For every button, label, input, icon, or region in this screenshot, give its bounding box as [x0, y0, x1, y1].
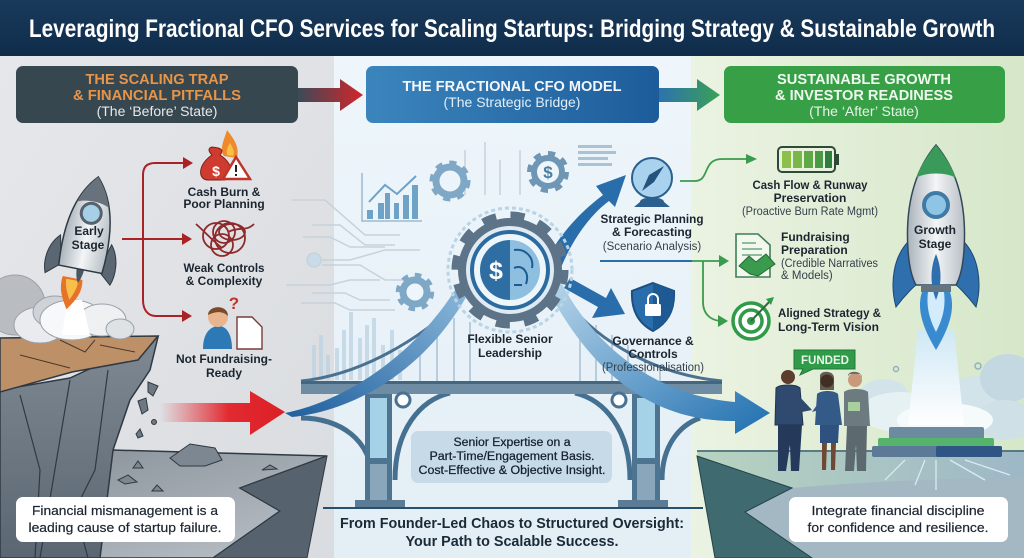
- callout: financial mismanagement: [16, 497, 235, 542]
- heading: sustainable growth: & INVESTOR READINESS: [775, 88, 953, 104]
- callout: senior expertise: Cost-Effective & Objective Insight.: [418, 465, 606, 477]
- heading: the fractional cfo model: (The Strategic Bridge): [444, 94, 580, 110]
- text: growth stage: Growth: [914, 223, 956, 237]
- heading: the fractional cfo model: [366, 66, 659, 123]
- icon: line chart: [362, 173, 422, 221]
- text: cash flow: Cash Flow & Runway: [752, 178, 868, 192]
- text: cash flow: [742, 178, 878, 218]
- right ground and cliff: [697, 451, 1024, 558]
- branching arrows: [122, 163, 186, 316]
- central gear: $: [489, 257, 503, 285]
- circuit lines: [286, 142, 520, 310]
- icon: confused founder with blank page: [203, 294, 262, 349]
- panel: bridge background: [334, 56, 691, 558]
- text: strategic planning: & Forecasting: [612, 225, 692, 239]
- text: strategic planning: [600, 212, 704, 253]
- central gear: [448, 208, 572, 332]
- closing statement: From Founder-Led Chaos to Structured Oversight:: [340, 515, 684, 532]
- arrowheads: [182, 157, 193, 322]
- heading: the scaling trap: [16, 66, 298, 123]
- panel: before state background: [0, 56, 334, 558]
- arrowhead: battery: [746, 154, 757, 164]
- arrow: to governance: [564, 278, 625, 318]
- callout: integrate financial discipline: for confidence and resilience.: [808, 520, 988, 535]
- text: fundraising preparation: Fundraising: [781, 230, 850, 244]
- text: not fundraising-ready: Ready: [206, 366, 242, 380]
- text: not fundraising-ready: Not Fundraising-: [176, 352, 272, 366]
- connector: ball to battery: [680, 159, 752, 181]
- text: governance and controls: Controls: [628, 347, 678, 361]
- text: aligned strategy: Aligned Strategy &: [778, 306, 881, 320]
- engine clouds: [860, 354, 1024, 440]
- text: growth stage: [914, 223, 956, 251]
- speech bubble: funded: [794, 350, 855, 375]
- smoke cloud: [0, 275, 134, 343]
- text: early stage: Early: [74, 224, 104, 238]
- icon: lower left gear: [398, 275, 432, 309]
- text: flexible senior leadership: Leadership: [478, 346, 542, 360]
- callout: financial mismanagement: Financial mismanagement is a: [32, 503, 219, 518]
- growth stage rocket: [893, 145, 979, 350]
- bridge: [301, 300, 722, 509]
- icon: battery: [778, 147, 839, 172]
- arrow: to strategic planning: [545, 175, 626, 270]
- icon: crystal ball compass: [632, 158, 672, 207]
- heading: sustainable growth: (The ‘After’ State): [809, 103, 919, 119]
- arrow: red momentum: [160, 391, 285, 435]
- text: flexible senior leadership: Flexible Senior: [467, 332, 553, 346]
- callout: senior expertise: Part-Time/Engagement Basis.: [430, 451, 594, 463]
- callout: integrate financial discipline: Integrate financial discipline: [812, 503, 984, 518]
- text: strategic planning: (Scenario Analysis): [603, 241, 701, 253]
- closing statement: [340, 515, 684, 550]
- launch platform: [872, 427, 1002, 457]
- text: governance and controls: [602, 334, 704, 374]
- text: governance and controls: Governance &: [612, 334, 694, 348]
- text: aligned strategy: [778, 306, 881, 334]
- text: weak controls: Weak Controls: [184, 261, 265, 275]
- arrowhead: fundraising: [719, 255, 729, 267]
- falling rocks: [136, 382, 158, 438]
- icon: small gear: [432, 163, 468, 199]
- speech bubble: funded: FUNDED: [801, 353, 849, 367]
- callout: senior expertise: Senior Expertise on a: [454, 437, 571, 449]
- heading: the scaling trap: THE SCALING TRAP: [86, 72, 229, 88]
- connector: green branch: [692, 261, 722, 321]
- left upper cliff: [0, 336, 158, 558]
- text: cash burn: Poor Planning: [183, 197, 265, 211]
- text: growth stage: Stage: [919, 237, 952, 251]
- arrow: swoosh from chaos to gear: [285, 282, 470, 417]
- text: fundraising preparation: & Models): [781, 270, 833, 282]
- heading: sustainable growth: [724, 66, 1005, 123]
- text: fundraising preparation: (Credible Narratives: [781, 258, 878, 270]
- callout: senior expertise: [411, 431, 612, 483]
- text: fundraising preparation: Preparation: [781, 243, 848, 257]
- icon: burning money bag: $: [212, 163, 220, 179]
- text: cash burn: [183, 185, 265, 211]
- text: not fundraising-ready: [176, 352, 272, 380]
- text: cash flow: Preservation: [774, 191, 846, 205]
- text: early stage: Stage: [72, 238, 105, 252]
- icon: burning money bag: [201, 130, 250, 180]
- icon: list lines: [578, 145, 616, 166]
- icon: dollar gear: [530, 154, 566, 190]
- investors shaking hands: [775, 370, 870, 471]
- icon: tangle: [196, 221, 254, 256]
- callout: integrate financial discipline: [789, 497, 1008, 542]
- panel: after state background: [691, 56, 1024, 558]
- text: cash burn: Cash Burn &: [188, 185, 261, 199]
- text: flexible senior leadership: [467, 332, 553, 360]
- callout: financial mismanagement: leading cause of startup failure.: [28, 520, 222, 535]
- icon: target: [733, 297, 774, 339]
- arrow: before to model: [298, 79, 363, 111]
- heading: the scaling trap: (The ‘Before’ State): [97, 103, 217, 119]
- connector: gear to fundraising: [600, 260, 692, 262]
- icon: security shield: [632, 283, 674, 331]
- closing statement: Your Path to Scalable Success.: [406, 533, 618, 550]
- background bar chart behind bridge: [312, 312, 402, 380]
- text: aligned strategy: Long-Term Vision: [778, 320, 879, 334]
- title banner: [0, 0, 1024, 56]
- text: governance and controls: (Professionalisation): [602, 362, 704, 374]
- text: early stage: [72, 224, 105, 252]
- arrow: model to growth: [659, 79, 720, 111]
- text: weak controls: & Complexity: [186, 274, 263, 288]
- heading: sustainable growth: SUSTAINABLE GROWTH: [777, 72, 951, 88]
- icon: document handshake: [736, 234, 775, 277]
- arrow: long swoosh to growth side: [548, 280, 770, 434]
- left lower ledge: [0, 444, 327, 558]
- heading: the fractional cfo model: THE FRACTIONAL CFO MODEL: [402, 79, 622, 95]
- icon: dollar gear: $: [543, 163, 553, 182]
- rocket exhaust beam: [908, 330, 964, 425]
- text: fundraising preparation: [781, 230, 878, 282]
- text: strategic planning: Strategic Planning: [600, 212, 704, 226]
- icon: confused founder with blank page: ?: [229, 294, 239, 313]
- text: cash flow: (Proactive Burn Rate Mgmt): [742, 206, 878, 218]
- text: weak controls: [184, 261, 265, 288]
- arrowhead: target: [718, 315, 728, 327]
- early stage rocket: [37, 170, 132, 317]
- heading: the scaling trap: & FINANCIAL PITFALLS: [73, 88, 241, 104]
